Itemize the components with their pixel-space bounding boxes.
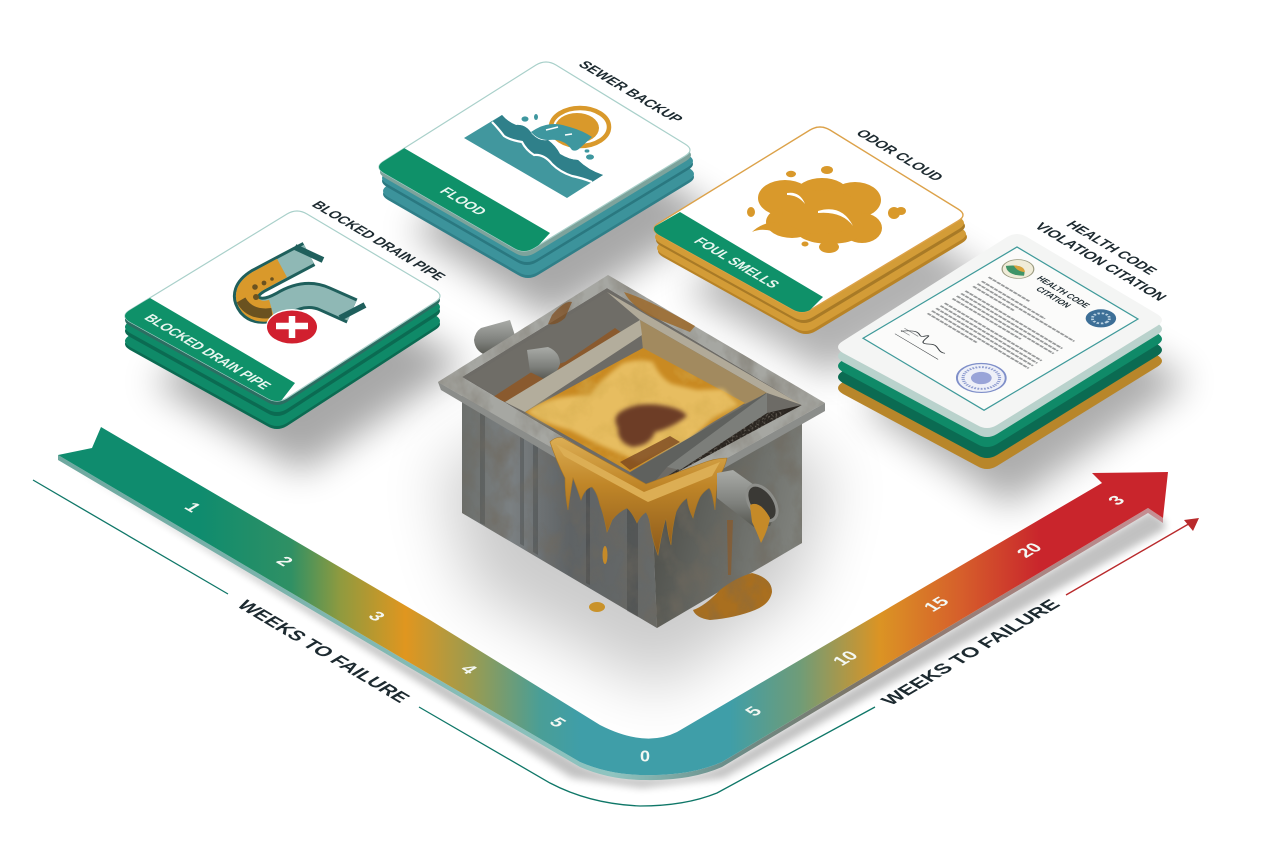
card: flood bbox=[370, 62, 694, 278]
label: violation citation: VIOLATION CITATION bbox=[1030, 221, 1170, 303]
icon: blocked pipe bbox=[241, 247, 365, 345]
dark chamber bbox=[650, 405, 802, 487]
timeline ribbon bbox=[58, 427, 1168, 788]
grease base bbox=[525, 348, 745, 472]
card: blocked drain pipe bbox=[110, 211, 440, 429]
lower brown bbox=[620, 436, 680, 470]
band: flood bbox=[379, 148, 550, 251]
week numbers: right arm: 20 bbox=[1012, 540, 1047, 560]
seal: green bbox=[996, 256, 1040, 282]
ribbon side bbox=[58, 455, 1163, 780]
week numbers: left arm: 4 bbox=[456, 662, 482, 677]
week numbers: right arm: 3 bbox=[1103, 493, 1129, 508]
band label: BLOCKED DRAIN PIPE bbox=[140, 312, 274, 392]
doc title: HEALTH CODE bbox=[1034, 275, 1092, 309]
rust streak bbox=[727, 520, 733, 575]
ribbon shadow bbox=[60, 458, 1165, 788]
signature bbox=[895, 325, 953, 359]
card: health code citation bbox=[838, 234, 1162, 469]
rim side bbox=[438, 382, 825, 512]
grease drop bbox=[589, 602, 605, 612]
week numbers: right arm: 10 bbox=[828, 648, 863, 668]
grease cream bbox=[527, 360, 739, 462]
body text lines bbox=[928, 277, 1085, 371]
stub pipe bbox=[527, 347, 560, 380]
ribbon surface bbox=[58, 427, 1168, 775]
opening bbox=[462, 288, 802, 488]
band label: FLOOD bbox=[435, 186, 490, 218]
right outlet pipe bbox=[717, 470, 783, 543]
icon: odor cloud bbox=[747, 166, 906, 253]
week numbers: right arm bbox=[740, 493, 1129, 719]
label: sewer backup: SEWER BACKUP bbox=[574, 59, 686, 125]
week numbers: left arm: 2 bbox=[272, 554, 298, 569]
week numbers: left arm: 3 bbox=[364, 609, 390, 624]
week numbers: left arm bbox=[180, 500, 571, 730]
label: health code: HEALTH CODE bbox=[1062, 219, 1160, 277]
seal: blue bbox=[1079, 306, 1122, 331]
right axis caption: WEEKS TO FAILURE bbox=[877, 597, 1065, 709]
band label: FOUL SMELLS bbox=[690, 236, 783, 291]
week numbers: right arm: 5 bbox=[740, 704, 766, 719]
divider: left bbox=[505, 320, 642, 412]
back pipe bbox=[474, 320, 518, 356]
grease swirl bbox=[537, 369, 744, 468]
doc subtitle: CITATION bbox=[1034, 285, 1073, 309]
left axis caption: WEEKS TO FAILURE bbox=[232, 598, 414, 706]
face: right bbox=[652, 420, 802, 628]
week numbers: left arm: 1 bbox=[180, 500, 206, 515]
band: foul smells bbox=[654, 212, 823, 312]
dark speckle bbox=[672, 410, 786, 474]
divider: right bbox=[629, 393, 767, 487]
rim bbox=[438, 275, 825, 503]
week numbers: right arm: 15 bbox=[919, 594, 954, 614]
grease trap tank bbox=[430, 270, 830, 630]
face: left bbox=[462, 395, 657, 628]
week number: zero: 0 bbox=[640, 748, 650, 765]
week numbers: left arm: 5 bbox=[545, 715, 571, 730]
rim rust bbox=[548, 292, 695, 332]
rim wear bbox=[438, 276, 824, 468]
band: blocked drain pipe bbox=[125, 298, 295, 401]
red axis arrow bbox=[1066, 518, 1199, 595]
label: odor cloud: ODOR CLOUD bbox=[852, 128, 946, 184]
icon: flood wave and sun bbox=[464, 108, 609, 198]
grease puddle bbox=[693, 573, 772, 620]
stamp seal bbox=[947, 358, 1016, 398]
brown mass bbox=[615, 404, 687, 447]
soft ground shadows bbox=[152, 130, 1189, 690]
right back wall bbox=[607, 292, 802, 405]
bottom axis curve bbox=[419, 707, 875, 806]
label: blocked drain pipe: BLOCKED DRAIN PIPE bbox=[307, 199, 449, 283]
left axis line bbox=[33, 480, 228, 594]
left chamber wall bbox=[467, 292, 640, 402]
card: foul smells bbox=[645, 127, 967, 334]
document sheet bbox=[863, 247, 1138, 410]
left chamber rust sludge bbox=[493, 328, 625, 402]
drop on face bbox=[602, 546, 608, 564]
grease overflow drips bbox=[550, 438, 727, 555]
main chamber wall bbox=[640, 320, 767, 404]
wear texture bbox=[430, 270, 830, 630]
grease rim highlight bbox=[556, 444, 720, 502]
ribs bbox=[480, 405, 638, 617]
